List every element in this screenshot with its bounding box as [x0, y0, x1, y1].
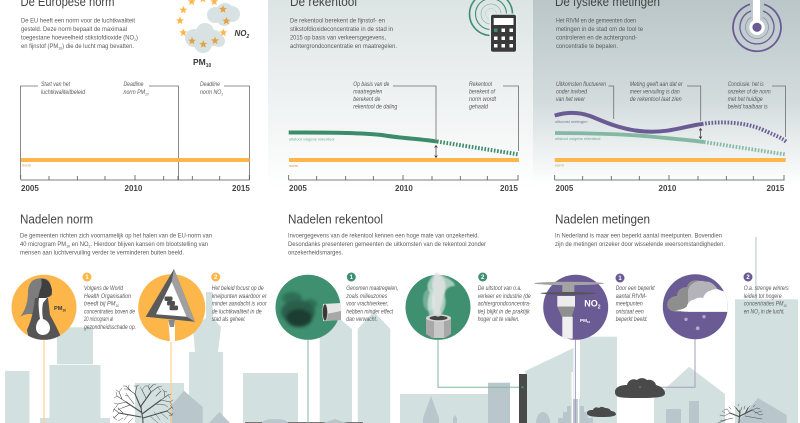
- text block: [212, 285, 267, 323]
- chart: metingen timeline: beleid haalbaar is: [728, 104, 768, 110]
- chart: Europese norm timeline: norm PM: [124, 89, 149, 96]
- badge 1: 1: [618, 276, 622, 282]
- text block: Europese norm intro: 2: [134, 37, 137, 42]
- text block: 10: [783, 304, 787, 308]
- text block: O.a. strenge winters: [744, 285, 789, 292]
- text block: Nadelen norm: mensen aan luchtvervuiling verder te verminderen buiten beeld.: [20, 250, 184, 256]
- chart: rekentool timeline: gehaald: [469, 104, 488, 110]
- icon: smoking chimney: [406, 255, 470, 340]
- text block: Nadelen norm: De gemeenten richten zich voornamelijk op het halen van de EU-norm van: [20, 232, 212, 240]
- text block: Europese norm intro: ): [136, 34, 138, 42]
- text block: [478, 285, 531, 323]
- chart: metingen timeline: 2005: [556, 184, 574, 193]
- text block: hebben minder effect: [346, 308, 394, 316]
- chart: metingen timeline: onzeker of de norm: [728, 88, 771, 96]
- chart: Europese norm timeline: 2010: [124, 184, 143, 193]
- text block: metingen intro: Het RIVM en de gemeenten doen: [556, 18, 636, 24]
- icon: measuring station: NO: [584, 299, 598, 309]
- text block: Volgens de World: [84, 285, 123, 292]
- chart: Europese norm timeline: 10: [145, 92, 149, 96]
- icon: person breathing PM10: 10: [62, 308, 66, 312]
- connector dots: [521, 386, 641, 388]
- icon: measuring station: 10: [587, 320, 591, 324]
- text block: Nadelen norm: 10: [66, 244, 71, 248]
- chart: rekentool timeline: rekentool de daling: [353, 104, 398, 110]
- text block: [744, 285, 789, 316]
- text block: achtergrondconcentra-: [478, 301, 531, 308]
- skyline: [5, 237, 798, 423]
- text block: [345, 285, 398, 323]
- chart: Europese norm timeline: Start van het: [41, 81, 70, 88]
- text block: voor vrachtverkeer,: [346, 301, 388, 308]
- text block: gezondheidsschade op.: [84, 324, 136, 331]
- text block: in de lucht.: [759, 308, 785, 316]
- text block: Nadelen metingen: zijn de metingen onzeker door wisselende weersomstandigheden.: [555, 241, 725, 248]
- dark clouds: [587, 378, 665, 417]
- panel: nadeel norm 2: [138, 269, 267, 342]
- text block: Nadelen metingen: [555, 232, 725, 248]
- icon: EU stars and clouds: PM: [193, 57, 206, 67]
- chart: metingen timeline: uitkomst metingen: [555, 119, 587, 124]
- chart: Europese norm timeline: 2: [220, 92, 223, 96]
- panel: nadeel rekentool 2: [406, 255, 531, 340]
- icon: person breathing PM10: [12, 275, 76, 345]
- text block: leiden tot hogere: [744, 293, 782, 300]
- chart: rekentool timeline: Op basis van de: [353, 81, 390, 88]
- text block: concentraties boven de: [84, 308, 135, 316]
- chart: Europese norm timeline: Deadline: [124, 81, 144, 88]
- text block: Health Organisation: [84, 293, 131, 300]
- panel background: fysieke metingen: [533, 0, 800, 185]
- text block: Europese norm intro: De EU heeft een norm voor de luchtkwaliteit: [21, 18, 135, 24]
- text block: dan verwacht.: [346, 316, 377, 323]
- text block: Nadelen norm: . Hierdoor blijven kansen om blootstelling van: [90, 241, 208, 248]
- chart: metingen timeline: norm: [555, 162, 564, 168]
- text block: stad als geheel.: [212, 316, 246, 323]
- chart: metingen timeline: de rekentool laat zien: [630, 96, 682, 103]
- chart: Europese norm timeline: 2015: [232, 184, 250, 193]
- text block: Nadelen rekentool: onzekerheidsmarges.: [288, 250, 343, 256]
- chimney: [519, 374, 527, 423]
- text block: rekentool intro: [290, 18, 397, 50]
- chart: rekentool timeline: uitstoot volgens rekentool: [289, 136, 334, 142]
- chart: metingen timeline: Meting geeft aan dat er: [630, 81, 683, 88]
- text block: Door een beperkt: [616, 285, 655, 292]
- chart: rekentool timeline: 2010: [395, 184, 413, 193]
- chart: rekentool timeline: maatregelen: [353, 88, 383, 96]
- icon: calculator with rings: [470, 0, 518, 53]
- text block: Europese norm intro: [21, 18, 138, 50]
- text block: [616, 285, 655, 323]
- chart: rekentool timeline: berekent de: [353, 96, 381, 103]
- icon: measuring station: 2: [598, 305, 601, 311]
- text block: beperkt beeld.: [616, 316, 648, 323]
- chart: Europese norm timeline: norm: [22, 162, 32, 168]
- text block: Genomen maatregelen,: [346, 285, 398, 292]
- icon: measuring station: [534, 275, 608, 340]
- chart: rekentool timeline: [289, 81, 519, 193]
- chart: Europese norm timeline: luchtkwaliteitbeleid: [41, 89, 85, 96]
- icon: traffic warning sign: [138, 269, 205, 342]
- icon: person breathing PM10: PM: [54, 306, 62, 312]
- text block: rekentool intro: stikstofdioxideconcentratie in de stad in: [290, 26, 393, 33]
- icon: exhaust with dark fumes: [276, 275, 341, 340]
- chart: Europese norm timeline: Deadline: [200, 81, 220, 88]
- text block: Nadelen rekentool: [288, 232, 487, 256]
- text block: Nadelen rekentool: Desondanks presenteren gemeenten de uitkomsten van de rekentool zonder: [288, 241, 487, 248]
- text block: 2: [757, 312, 760, 316]
- text block: 10: [115, 304, 119, 308]
- chart: rekentool timeline: Rekentool: [469, 81, 493, 88]
- icon: measuring probe with rings: [733, 0, 781, 51]
- tree right: [718, 404, 763, 423]
- text block: zoals milieuzones: [345, 293, 387, 300]
- chart: rekentool timeline: 2005: [289, 184, 307, 193]
- text block: rekentool intro: 2015 op basis van verkeersgegevens,: [290, 34, 386, 42]
- icon: EU stars and clouds: [176, 0, 250, 69]
- badge 2: 2: [746, 275, 750, 281]
- text block: Nadelen norm: 2: [89, 244, 91, 248]
- chart: metingen timeline: onder invloed: [556, 88, 587, 96]
- text block: Europese norm intro: en fijnstof (PM: [21, 43, 63, 50]
- icon: measuring station: PM: [580, 318, 587, 323]
- chart: metingen timeline: van het weer: [556, 96, 586, 103]
- icon: EU stars and clouds: 2: [246, 34, 250, 40]
- text block: Europese norm intro: toegestane hoeveelheid stikstofdioxide (NO: [21, 34, 148, 42]
- text block: Nadelen metingen: In Nederland is maar een beperkt aantal meetpunten. Bovendien: [555, 232, 722, 240]
- chart: metingen timeline: meer vervuiling is dan: [630, 88, 680, 96]
- chart: rekentool timeline: norm wordt: [469, 96, 496, 103]
- panel: nadeel norm 1: [12, 272, 136, 345]
- text block: hoger uit te vallen.: [478, 316, 520, 323]
- text block: verkeer en industrie (de: [478, 293, 531, 300]
- panel: nadeel rekentool 1: [276, 272, 398, 340]
- text block: concentraties PM: [744, 301, 792, 308]
- text block: treedt bij PM: [84, 301, 119, 308]
- text block: metingen intro: controleren en de achtergrond-: [556, 34, 637, 42]
- chart: Europese norm timeline: [20, 81, 250, 193]
- text block: meetpunten: [616, 301, 643, 308]
- text block: Nadelen norm: en NO: [70, 241, 89, 248]
- icon: EU stars and clouds: NO: [234, 29, 246, 38]
- panel: nadeel metingen 1: [534, 274, 655, 340]
- chart: rekentool timeline: norm: [289, 163, 299, 168]
- text block: en NO: [744, 308, 762, 316]
- text block: 20 microgram al: [83, 316, 113, 323]
- text block: rekentool intro: achtergrondconcentratie en maatregelen.: [290, 43, 397, 50]
- chart: Europese norm timeline: 2005: [21, 184, 39, 193]
- text block: metingen intro: concentratie te bepalen.: [556, 43, 618, 50]
- panel: nadeel metingen 2: [663, 272, 789, 339]
- connector lines: [44, 338, 695, 423]
- icon: EU stars and clouds: 10: [206, 63, 212, 69]
- chart: rekentool timeline: berekent of: [469, 88, 496, 96]
- text block: [83, 285, 136, 331]
- chart: Europese norm timeline: norm NO: [200, 89, 225, 96]
- text block: metingen intro: [556, 18, 643, 50]
- text block: Het beleid focust op de: [212, 285, 264, 292]
- text block: Europese norm intro: 10: [58, 46, 63, 50]
- chart: metingen timeline: uitstoot volgens rekentool: [555, 136, 600, 141]
- text block: Europese norm intro: ) die de lucht mag bevatten.: [62, 43, 134, 50]
- icon: winter clouds: [663, 274, 728, 339]
- text block: knelpunten waardoor er: [212, 293, 267, 300]
- chart: rekentool timeline: 2015: [500, 184, 518, 193]
- text block: aantal RIVM-: [616, 293, 647, 300]
- chart: metingen timeline: Uitkomsten fluctueren: [556, 81, 606, 88]
- heading: Nadelen norm: Nadelen norm: [20, 212, 93, 226]
- chart: metingen timeline: 2015: [766, 184, 785, 193]
- tree left: [113, 384, 173, 423]
- text block: tie) blijkt in de praktijk: [478, 308, 530, 316]
- chart: metingen timeline: met het huidige: [728, 96, 763, 103]
- badge 2: 2: [214, 275, 218, 281]
- text block: minder aandacht is voor: [212, 301, 267, 308]
- text block: ontstaat een: [616, 308, 644, 316]
- text block: Nadelen rekentool: Invoergegevens van de rekentool kennen een hoge mate van onzekerheid.: [288, 232, 479, 240]
- text block: Europese norm intro: gesteld. Deze norm bepaalt de maximaal: [21, 26, 127, 33]
- text block: metingen intro: metingen in de stad om de tool te: [556, 26, 643, 33]
- chart: metingen timeline: [555, 81, 786, 193]
- text block: de luchtkwaliteit in de: [212, 308, 262, 316]
- text block: Nadelen norm: [20, 232, 212, 256]
- text block: Nadelen norm: 40 microgram PM: [20, 241, 72, 248]
- heading: Nadelen metingen: Nadelen metingen: [555, 212, 650, 226]
- chart: metingen timeline: 2010: [658, 184, 677, 193]
- heading: Nadelen rekentool: Nadelen rekentool: [288, 212, 383, 226]
- text block: De uitstoot van o.a.: [478, 285, 522, 292]
- badge 1: 1: [85, 275, 89, 281]
- badge 1: 1: [350, 275, 354, 281]
- chart: metingen timeline: Conclusie: het is: [728, 81, 764, 88]
- text block: rekentool intro: De rekentool berekent de fijnstof- en: [290, 18, 385, 24]
- panel background: rekentool: [268, 0, 533, 190]
- badge 2: 2: [481, 275, 485, 281]
